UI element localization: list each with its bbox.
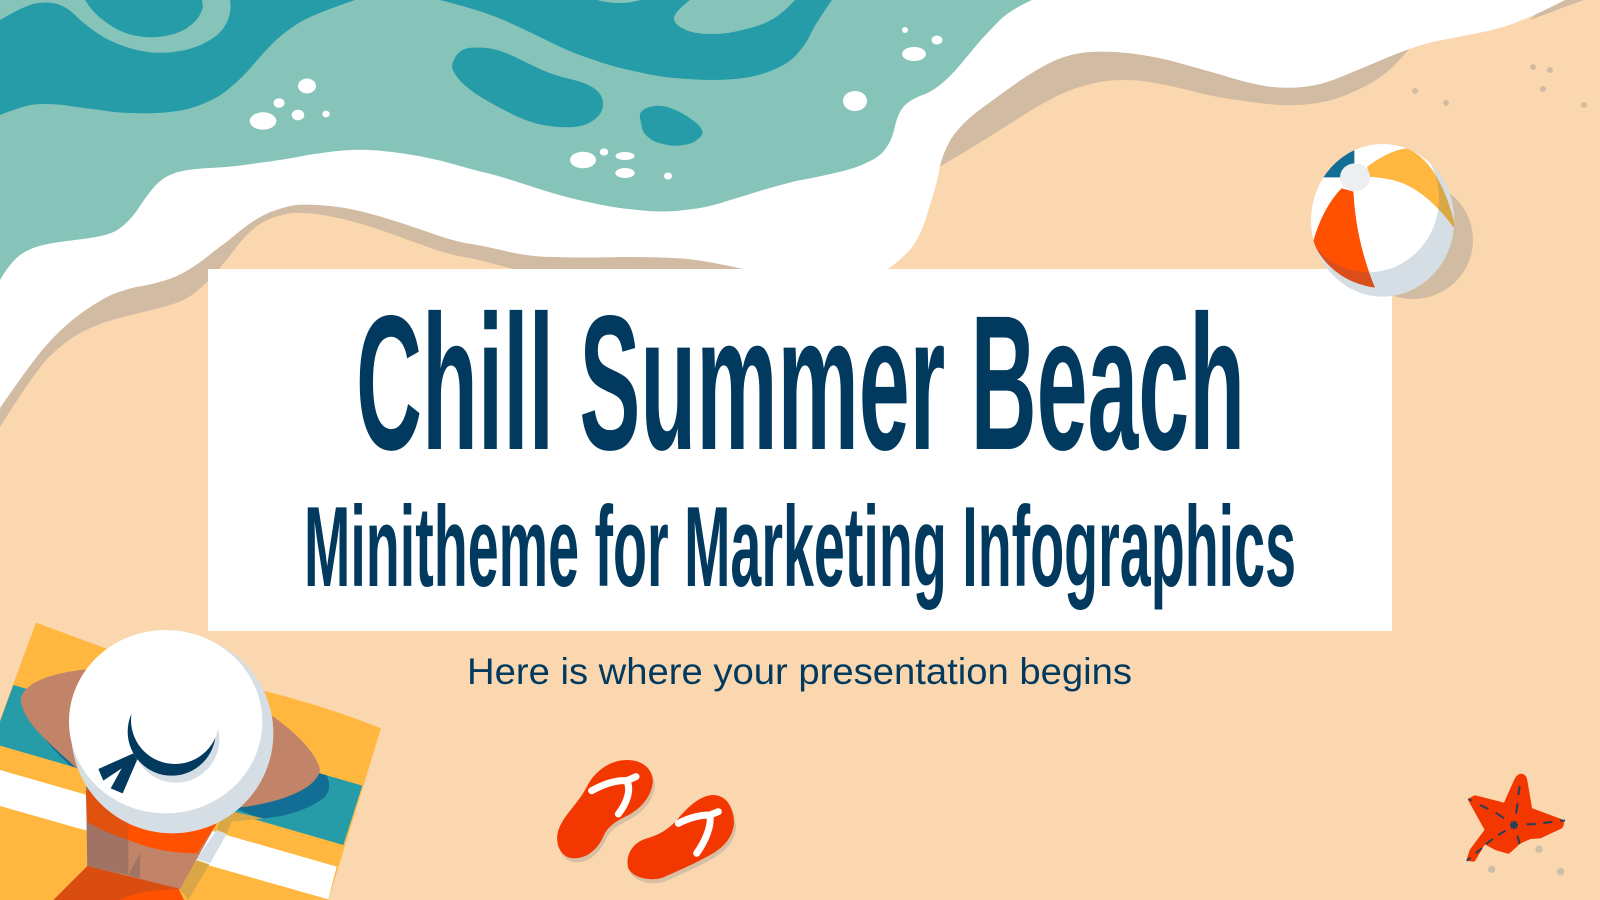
flip flop soles xyxy=(557,760,734,879)
icon: starfish xyxy=(1467,776,1565,875)
hat underside xyxy=(71,633,273,833)
towel teal stripe xyxy=(0,685,362,845)
shallow swirls inside deep water xyxy=(0,0,795,53)
deep water swirl centre xyxy=(85,0,203,37)
hat ribbon band xyxy=(128,688,216,776)
flip flop shadows xyxy=(559,764,736,883)
swimsuit top xyxy=(86,790,217,853)
starfish pebbles xyxy=(1488,846,1564,875)
hat crown xyxy=(131,676,219,764)
shallow water xyxy=(0,0,1032,280)
torso shade xyxy=(86,787,128,875)
hat brim xyxy=(21,669,320,807)
swimsuit bottom xyxy=(53,866,184,900)
starfish body xyxy=(1469,776,1562,859)
brim shadow on towel xyxy=(44,738,330,818)
tagline: Here is where your presentation begins xyxy=(467,651,1132,692)
swimsuit top shade xyxy=(86,790,128,840)
starfish dashes xyxy=(1467,786,1565,861)
torso fold xyxy=(128,853,140,878)
title panel xyxy=(208,269,1392,631)
white sea foam xyxy=(0,0,1565,408)
flip flop straps xyxy=(592,777,718,853)
icon: flip flops xyxy=(557,760,736,883)
water bubbles xyxy=(250,27,942,180)
beach ball shadow xyxy=(1353,181,1473,299)
icon: beach ball xyxy=(1311,144,1454,297)
sand pebbles top right xyxy=(1412,64,1587,108)
ribbon shadow xyxy=(133,696,219,783)
brim shadow on yellow stripe xyxy=(217,812,263,833)
torso xyxy=(86,787,217,889)
towel xyxy=(0,623,381,900)
deep water patches xyxy=(0,0,832,146)
swimsuit bottom highlight xyxy=(120,889,184,900)
body shadow on towel xyxy=(180,860,209,900)
body shadow xyxy=(197,830,227,863)
illustration: sunbather on towel with hat xyxy=(0,623,381,900)
hat top xyxy=(69,630,262,813)
ribbon tails xyxy=(98,753,137,793)
towel white stripe xyxy=(0,770,337,899)
wet sand band xyxy=(0,0,1584,427)
